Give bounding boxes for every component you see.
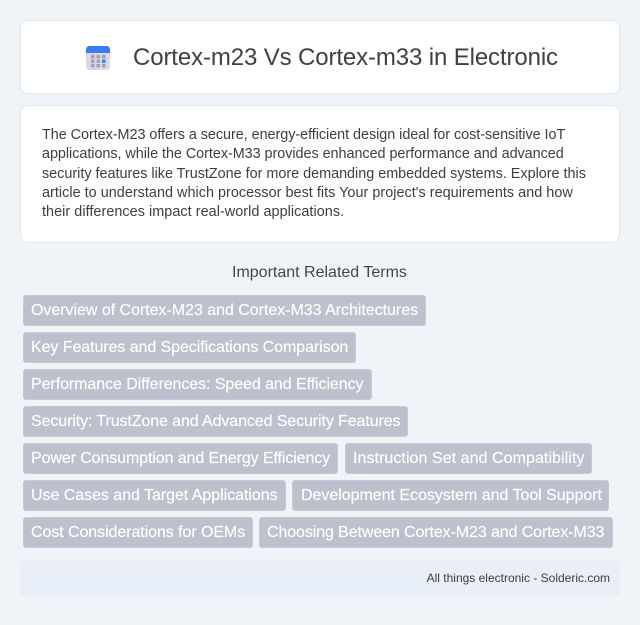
icon: calendar xyxy=(86,46,110,70)
tag: Choosing Between Cortex-M23 and Cortex-M33 xyxy=(267,524,604,541)
tag: Security: TrustZone and Advanced Security Features xyxy=(31,413,400,430)
tag xyxy=(23,332,356,363)
tag: Power Consumption and Energy Efficiency xyxy=(31,450,330,467)
intro text panel xyxy=(20,105,620,243)
tag xyxy=(292,480,609,511)
tag: Development Ecosystem and Tool Support xyxy=(301,487,602,504)
intro paragraph: applications, while the Cortex-M33 provides enhanced performance and advanced xyxy=(42,146,564,162)
tag xyxy=(23,480,286,511)
tag xyxy=(23,295,426,326)
footer text: All things electronic - Solderic.com xyxy=(427,571,610,585)
tag xyxy=(23,406,408,437)
section heading: important related terms: Important Related Terms xyxy=(232,264,407,281)
tag xyxy=(23,517,253,548)
tag: Instruction Set and Compatibility xyxy=(353,450,584,467)
intro paragraph: their differences impact real-world applications. xyxy=(42,204,344,220)
tag xyxy=(23,369,372,400)
tag list xyxy=(23,295,613,548)
intro paragraph: security features like TrustZone for more demanding embedded systems. Explore this xyxy=(42,166,586,182)
tag xyxy=(345,443,592,474)
tag: Cost Considerations for OEMs xyxy=(31,524,245,541)
tag: Key Features and Specifications Comparison xyxy=(31,339,348,356)
tag xyxy=(23,443,338,474)
footer bar xyxy=(20,561,620,595)
tag: Performance Differences: Speed and Efficiency xyxy=(31,376,363,393)
intro paragraph xyxy=(42,127,586,220)
intro paragraph: article to understand which processor best fits Your project's requirements and how xyxy=(42,184,573,200)
header card xyxy=(20,20,620,94)
title: Cortex-m23 Vs Cortex-m33 in Electronic xyxy=(133,44,558,71)
tag: Use Cases and Target Applications xyxy=(31,487,278,504)
tag xyxy=(259,517,613,548)
tag: Overview of Cortex-M23 and Cortex-M33 Architectures xyxy=(31,302,418,319)
intro paragraph: The Cortex-M23 offers a secure, energy-efficient design ideal for cost-sensitive IoT xyxy=(42,127,565,143)
